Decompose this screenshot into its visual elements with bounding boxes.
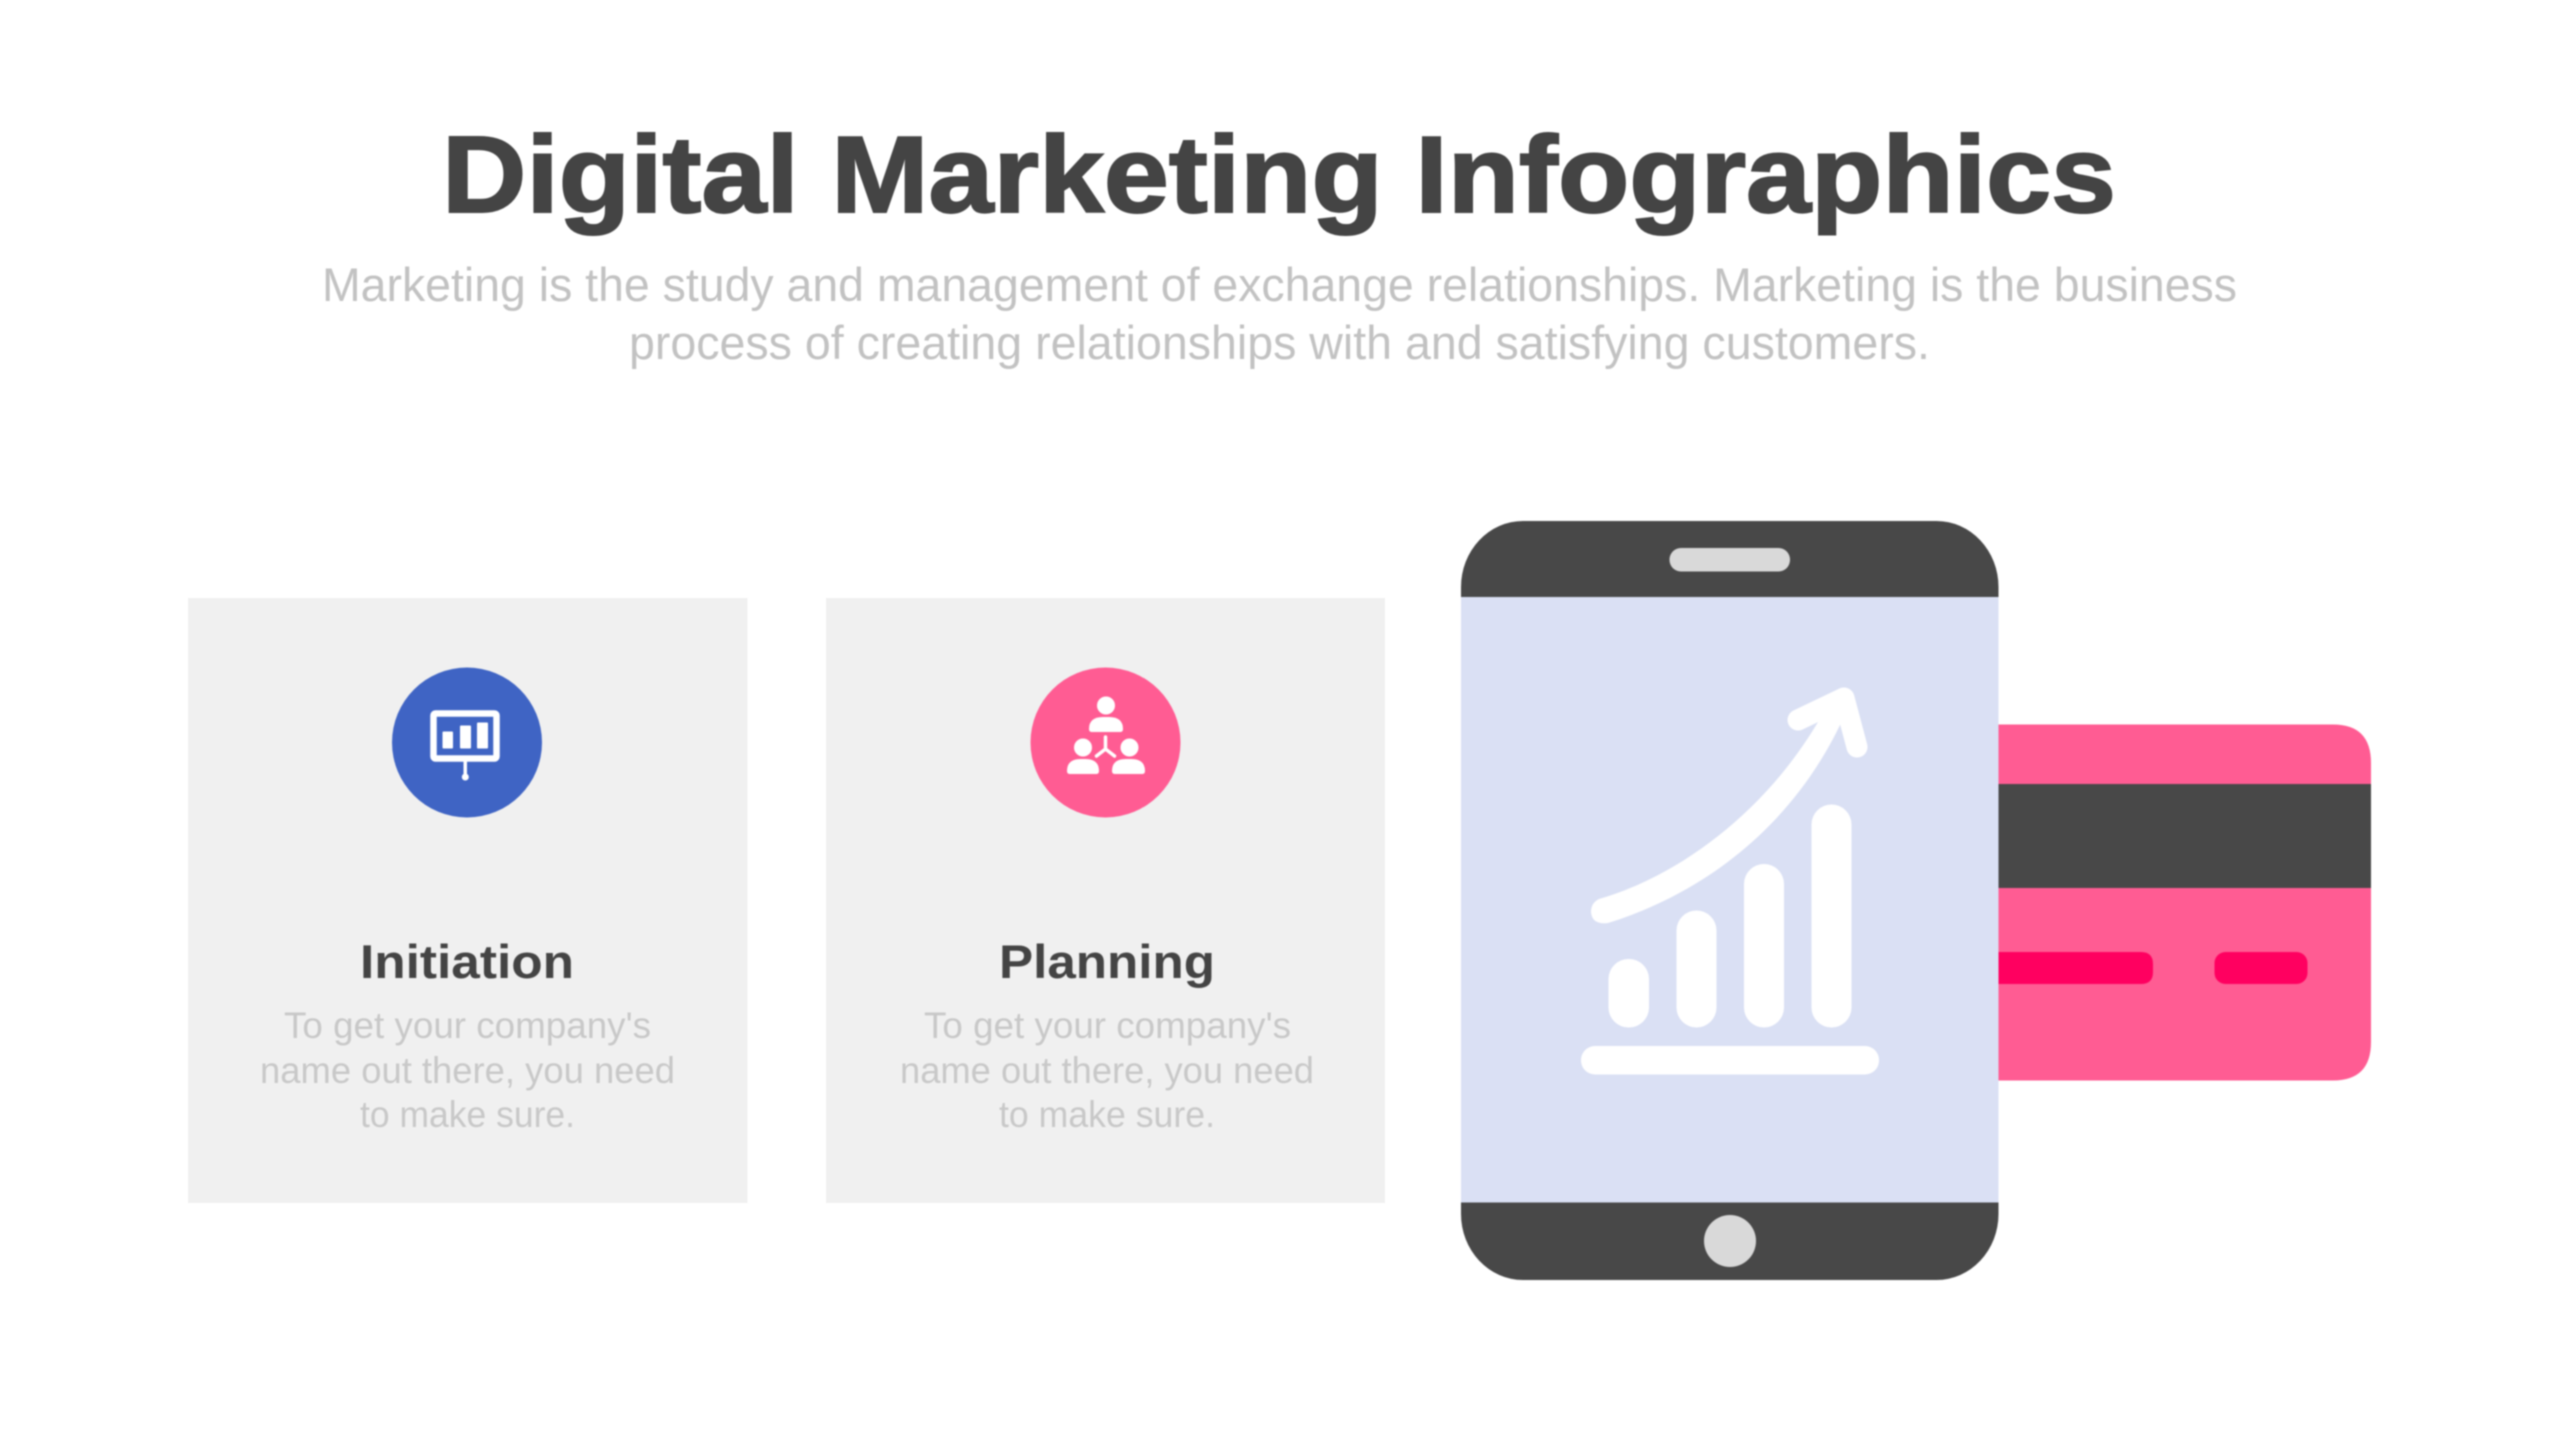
illustration: phone <box>1461 521 1998 1280</box>
text: initiation body: to make sure. <box>360 1094 575 1135</box>
text: planning body: To get your company's <box>924 1005 1291 1046</box>
subtitle: process of creating relationships with and satisfying customers. <box>629 316 1930 369</box>
icon: team hierarchy <box>1030 668 1180 818</box>
subtitle <box>322 258 2237 369</box>
illustration: credit card <box>1990 724 2371 1080</box>
text: initiation body: name out there, you need <box>260 1050 675 1091</box>
panel: planning <box>826 598 1385 1203</box>
panel: initiation <box>188 598 748 1203</box>
arrow: growth trend <box>1591 698 1857 923</box>
text: planning body <box>900 1005 1314 1135</box>
subtitle: Marketing is the study and management of exchange relationships. Marketing is the business <box>322 258 2237 311</box>
chart: growth bars <box>1581 804 1879 1074</box>
title: Digital Marketing Infographics <box>442 114 2116 236</box>
phone home button <box>1704 1215 1756 1267</box>
heading: planning: Planning <box>999 935 1215 988</box>
icon: presentation board <box>392 668 542 818</box>
text: planning body: name out there, you need <box>900 1050 1314 1091</box>
phone speaker <box>1670 548 1790 572</box>
text: planning body: to make sure. <box>999 1094 1215 1135</box>
heading: initiation: Initiation <box>360 935 574 988</box>
text: initiation body <box>260 1005 675 1135</box>
text: initiation body: To get your company's <box>284 1005 651 1046</box>
